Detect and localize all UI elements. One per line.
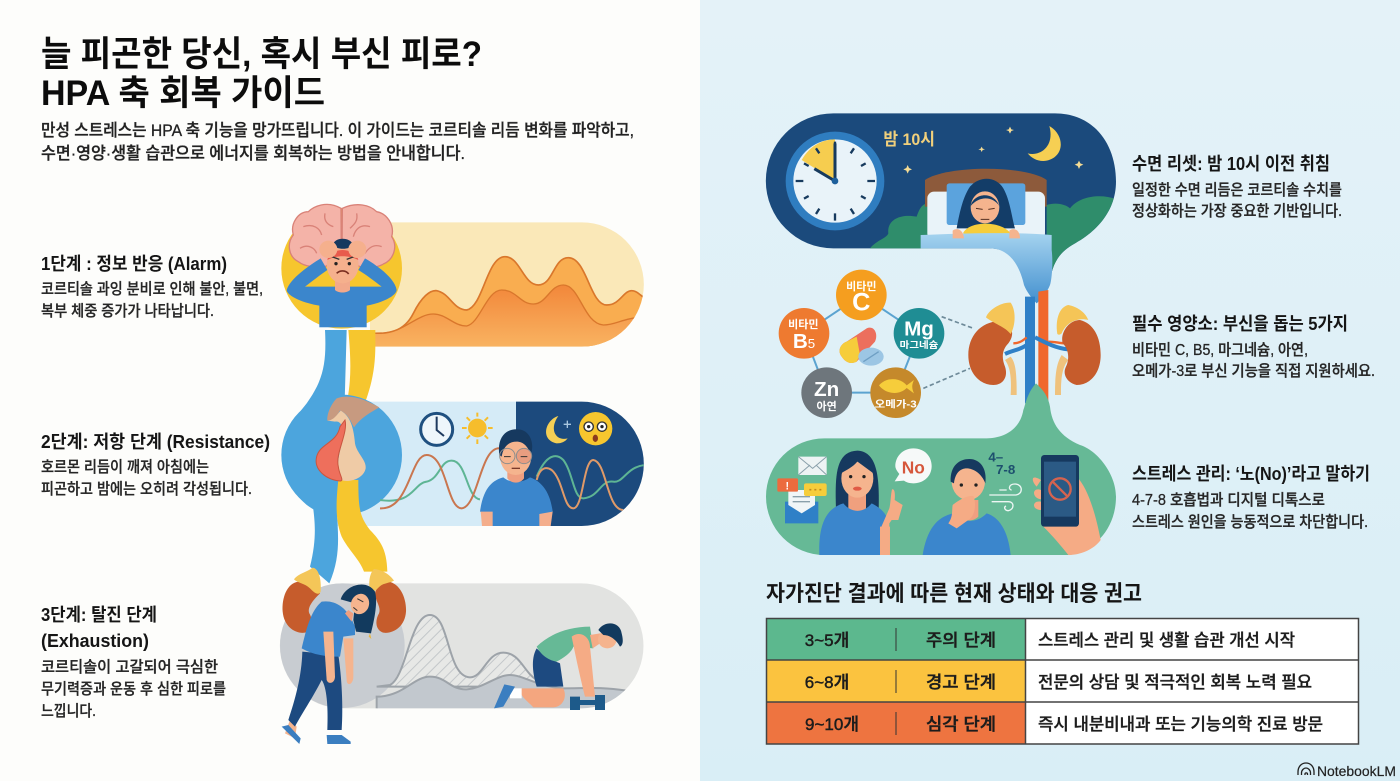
label: 4-7-8 breathing: 7-8 xyxy=(996,462,1015,477)
self-check table xyxy=(766,618,1358,744)
panel: resistance rhythm pill xyxy=(333,402,644,526)
stage 1 text xyxy=(41,254,263,320)
section: nutrients text: 비타민 C, B5, 마그네슘, 아연, xyxy=(1132,341,1308,359)
row: severe: 9~10개 xyxy=(805,715,859,734)
speech bubble: No: No xyxy=(902,457,925,477)
row: warning: 전문의 상담 및 적극적인 회복 노력 필요 xyxy=(1038,673,1312,692)
hormone tube: yellow upper xyxy=(347,330,375,400)
row: warning xyxy=(766,660,1358,702)
left panel background xyxy=(0,0,700,781)
icon: clock 10pm xyxy=(786,132,884,230)
icon: tired man xyxy=(480,429,553,526)
panel: alarm wave pill xyxy=(370,222,645,350)
vessel: aorta xyxy=(1038,290,1048,403)
stage 1 text: 코르티솔 과잉 분비로 인해 불안, 불면, xyxy=(41,280,263,298)
self-check heading: 자가진단 결과에 따른 현재 상태와 대응 권고 xyxy=(766,581,1142,606)
stage 2 text: 호르몬 리듬이 깨져 아침에는 xyxy=(41,458,209,476)
icon: woman saying no xyxy=(819,451,903,555)
vitamin C badge: C xyxy=(852,289,870,317)
title xyxy=(41,35,482,113)
row: caution: 3~5개 xyxy=(805,631,849,650)
icon: exhausted woman xyxy=(282,584,376,744)
panel: stress management green shape xyxy=(766,383,1116,555)
magnesium badge: 마그네슘 xyxy=(900,339,939,350)
vessel: vena cava xyxy=(1025,297,1035,403)
sleeves and torso xyxy=(287,258,397,327)
icon: left kidney xyxy=(283,568,321,633)
blue bulb circle xyxy=(281,395,402,515)
pentagon ring xyxy=(804,295,919,393)
section: sleep reset text: 정상화하는 가장 중요한 기반입니다. xyxy=(1132,202,1342,220)
zinc badge xyxy=(801,367,852,418)
intro text: 수면·영양·생활 습관으로 에너지를 회복하는 방법을 안내합니다. xyxy=(41,144,465,163)
section: nutrients text: 필수 영양소: 부신을 돕는 5가지 xyxy=(1132,314,1348,334)
vitamin B5 badge xyxy=(779,308,829,359)
zinc badge: Zn xyxy=(814,378,839,401)
omega-3 badge xyxy=(870,367,921,418)
magnesium badge: Mg xyxy=(904,317,934,340)
section: sleep reset text xyxy=(1132,154,1342,220)
icon: left kidney with adrenal xyxy=(968,303,1027,395)
icon: pills xyxy=(840,328,884,366)
row: caution xyxy=(766,618,1358,660)
right panel background xyxy=(700,0,1400,781)
label: 4-7-8 breathing: 4– xyxy=(988,449,1003,464)
vitamin B5 badge: B5 xyxy=(793,330,815,353)
dashed connectors xyxy=(923,317,973,388)
row: caution: 주의 단계 xyxy=(926,631,996,650)
brain xyxy=(289,204,395,268)
icon: envelopes and alerts xyxy=(777,457,827,523)
icon: moon xyxy=(546,416,568,443)
icon: clock xyxy=(421,413,453,445)
left flow illustration: exhaustion xyxy=(280,568,643,744)
row: warning: 6~8개 xyxy=(805,673,849,692)
green hills xyxy=(870,196,1114,271)
circle: alarm yellow xyxy=(281,208,402,329)
icon: right kidney xyxy=(369,569,406,633)
stage 2 text: 피곤하고 밤에는 오히려 각성됩니다. xyxy=(41,480,252,498)
chart: nighttime rhythm waves xyxy=(537,456,645,510)
hands over blanket xyxy=(953,229,1020,238)
icon: stars xyxy=(903,127,1083,174)
section: stress text xyxy=(1132,464,1370,531)
title: 늘 피곤한 당신, 혹시 부신 피로? xyxy=(41,35,482,74)
circle: grey bulb xyxy=(280,583,405,708)
section: stress text: 스트레스 원인을 능동적으로 차단합니다. xyxy=(1132,513,1368,531)
left flow illustrations: alarm + resistance xyxy=(281,204,645,583)
magnesium badge xyxy=(894,308,944,359)
section: stress text: 4-7-8 호흡법과 디지털 디톡스로 xyxy=(1132,491,1325,509)
vitamin B5 badge: 비타민 xyxy=(788,318,818,331)
stage 3 text: 코르티솔이 고갈되어 극심한 xyxy=(41,658,218,676)
row: severe: 심각 단계 xyxy=(926,715,996,734)
icon: hand with blocked phone xyxy=(1033,455,1101,555)
hands xyxy=(319,241,337,258)
intro text: 만성 스트레스는 HPA 축 기능을 망가뜨립니다. 이 가이드는 코르티솔 리듬 변화를 파악하고, xyxy=(41,121,634,140)
NotebookLM logo: NotebookLM xyxy=(1317,763,1396,779)
hormone tube: blue with hypothalamus bulb xyxy=(282,330,347,583)
vitamin C badge: 비타민 xyxy=(846,280,876,293)
row: severe: 즉시 내분비내과 또는 기능의학 진료 방문 xyxy=(1038,715,1323,734)
panel: night sky pill xyxy=(766,113,1116,280)
title: HPA 축 회복 가이드 xyxy=(41,74,325,113)
stage 3 text: (Exhaustion) xyxy=(41,631,149,651)
icon: man practising breathing xyxy=(923,459,1011,555)
icon: right kidney with adrenal xyxy=(1035,305,1101,395)
vitamin C badge xyxy=(836,270,887,320)
panel: exhaustion pill xyxy=(280,583,643,708)
icon: exhausted man with dumbbell xyxy=(494,623,623,710)
section: stress text: 스트레스 관리: ‘노(No)’라고 말하기 xyxy=(1132,464,1370,484)
hormone tube: yellow lower xyxy=(337,480,387,572)
section: nutrients text xyxy=(1132,314,1375,380)
stage 3 text: 느낍니다. xyxy=(41,702,96,720)
section: nutrients text: 오메가-3로 부신 기능을 직접 지원하세요. xyxy=(1132,362,1375,380)
face xyxy=(327,247,359,283)
icon: sun xyxy=(462,413,493,444)
icon: bed and sleeping woman xyxy=(925,169,1047,240)
stage 3 text xyxy=(41,605,226,720)
icon: startled emoji xyxy=(579,412,612,445)
stage 1 text: 1단계 : 정보 반응 (Alarm) xyxy=(41,254,227,274)
stage 1 text: 복부 체중 증가가 나타납니다. xyxy=(41,302,214,320)
stage 2 text xyxy=(41,432,270,498)
nutrients and stress illustrations xyxy=(766,270,1116,555)
chart: daytime rhythm waves xyxy=(380,448,500,508)
section: sleep reset text: 수면 리셋: 밤 10시 이전 취침 xyxy=(1132,154,1330,174)
stage 2 text: 2단계: 저항 단계 (Resistance) xyxy=(41,432,270,452)
blanket flowing into tube xyxy=(921,233,1052,303)
row: warning: 경고 단계 xyxy=(926,673,996,692)
icon: sparkle xyxy=(564,421,571,428)
row: caution: 스트레스 관리 및 생활 습관 개선 시작 xyxy=(1038,631,1295,650)
icon: stressed man with brain xyxy=(287,204,397,327)
icon: envelopes and alerts: ! xyxy=(786,480,789,492)
label: 10pm: 밤 10시 xyxy=(883,130,935,149)
omega-3 badge: 오메가-3 xyxy=(875,398,917,410)
intro text xyxy=(41,121,634,163)
speech bubble: No xyxy=(895,448,932,483)
chart: depleted cortisol curves xyxy=(377,615,627,710)
section: sleep reset text: 일정한 수면 리듬은 코르티솔 수치를 xyxy=(1132,181,1342,199)
icon: hypothalamus and pituitary xyxy=(316,397,379,481)
icon: breath wind xyxy=(989,484,1021,511)
row: severe xyxy=(766,702,1358,744)
icon: crescent moon xyxy=(1028,126,1061,161)
stage 3 text: 3단계: 탈진 단계 xyxy=(41,605,157,625)
stage 3 text: 무기력증과 운동 후 심한 피로를 xyxy=(41,680,226,698)
neck xyxy=(335,280,350,292)
zinc badge: 아연 xyxy=(817,400,837,413)
sleep reset illustration xyxy=(766,113,1118,303)
label: 4-7-8 breathing xyxy=(988,449,1015,477)
